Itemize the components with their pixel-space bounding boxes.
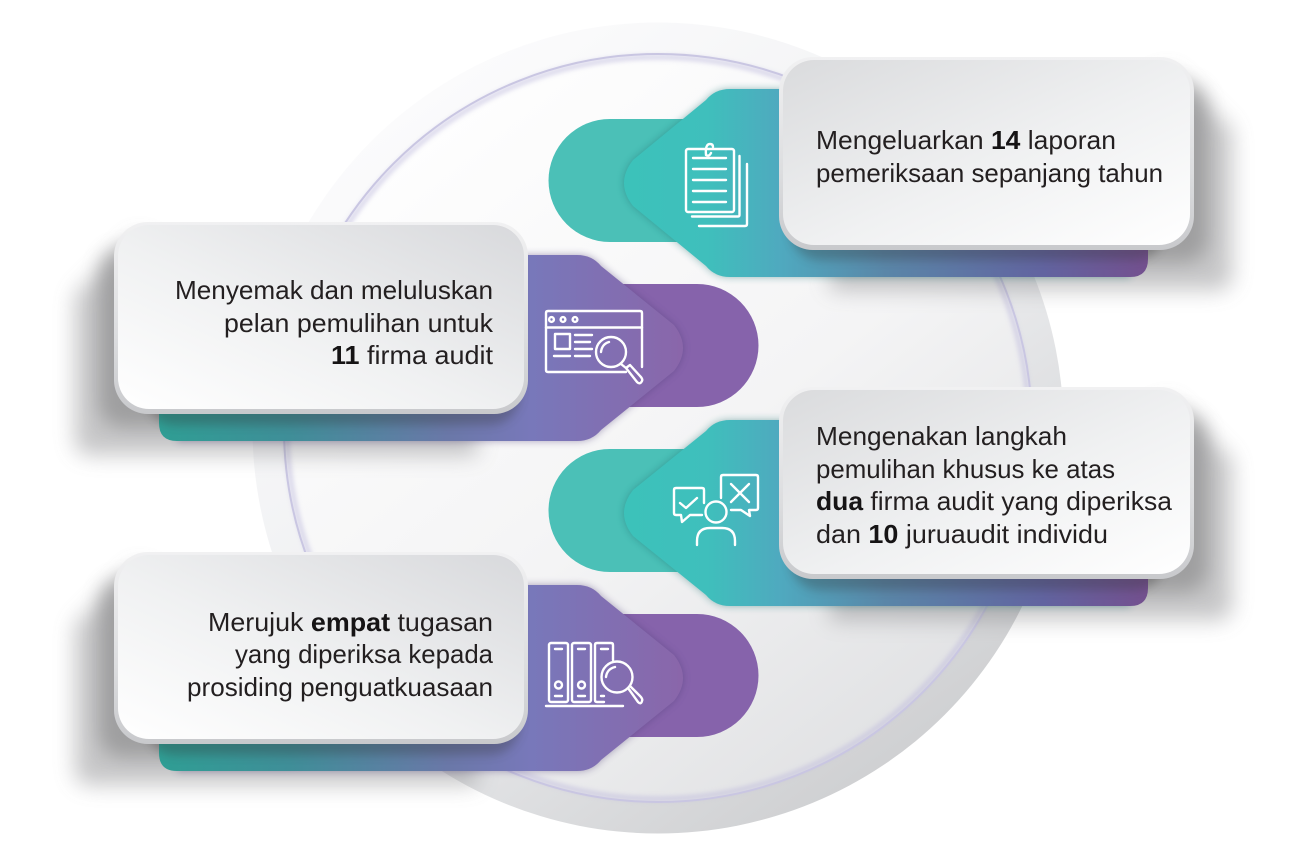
card text: Merujuk empat tugasan	[208, 607, 493, 637]
card text	[187, 607, 494, 702]
panel: pelan pemulihan	[75, 222, 758, 455]
card text: yang diperiksa kepada	[235, 639, 494, 669]
text card	[779, 387, 1194, 579]
icon: documents	[686, 144, 747, 226]
purple hexagon	[159, 255, 683, 441]
card text	[816, 421, 1173, 549]
panel: langkah pemulihan khusus	[548, 387, 1232, 620]
icon: binders with magnifier	[546, 643, 642, 706]
background disc	[252, 22, 1064, 834]
teal hexagon	[624, 89, 1148, 277]
purple pill	[547, 614, 758, 737]
card text: prosiding penguatkuasaan	[187, 672, 493, 702]
teal hexagon	[624, 420, 1148, 606]
card text	[816, 125, 1163, 188]
purple hexagon	[159, 585, 683, 771]
panel: laporan pemeriksaan	[549, 57, 1232, 290]
card contact shadow	[145, 235, 520, 425]
card cast shadow	[75, 235, 477, 455]
hexagon shadow	[624, 89, 1130, 277]
teal pill	[548, 449, 760, 572]
hexagon shadow	[177, 255, 683, 441]
card text: pemulihan khusus ke atas	[816, 454, 1115, 484]
hexagon shadow	[177, 585, 683, 771]
card contact shadow	[790, 70, 1165, 260]
hexagon shadow	[624, 420, 1130, 606]
icon: person with speech bubbles	[674, 475, 758, 545]
text card	[114, 552, 528, 744]
icon: browser with magnifier	[546, 311, 642, 383]
card text: Mengeluarkan 14 laporan	[816, 125, 1116, 155]
purple pill	[547, 284, 758, 407]
text card	[779, 57, 1194, 250]
card text: dan 10 juruaudit individu	[816, 519, 1108, 549]
card text: pelan pemulihan untuk	[224, 308, 494, 338]
card contact shadow	[145, 565, 520, 755]
card text: pemeriksaan sepanjang tahun	[816, 158, 1163, 188]
card contact shadow	[790, 400, 1165, 590]
panel: prosiding penguatkuasaan	[75, 552, 758, 785]
text card	[114, 222, 528, 414]
card text: dua firma audit yang diperiksa	[816, 486, 1173, 516]
card text	[175, 275, 494, 370]
card cast shadow	[830, 400, 1232, 620]
card text: 11 firma audit	[331, 340, 494, 370]
card text: Menyemak dan meluluskan	[175, 275, 493, 305]
card cast shadow	[830, 70, 1232, 290]
teal pill	[549, 119, 760, 242]
card cast shadow	[75, 565, 477, 785]
card text: Mengenakan langkah	[816, 421, 1067, 451]
